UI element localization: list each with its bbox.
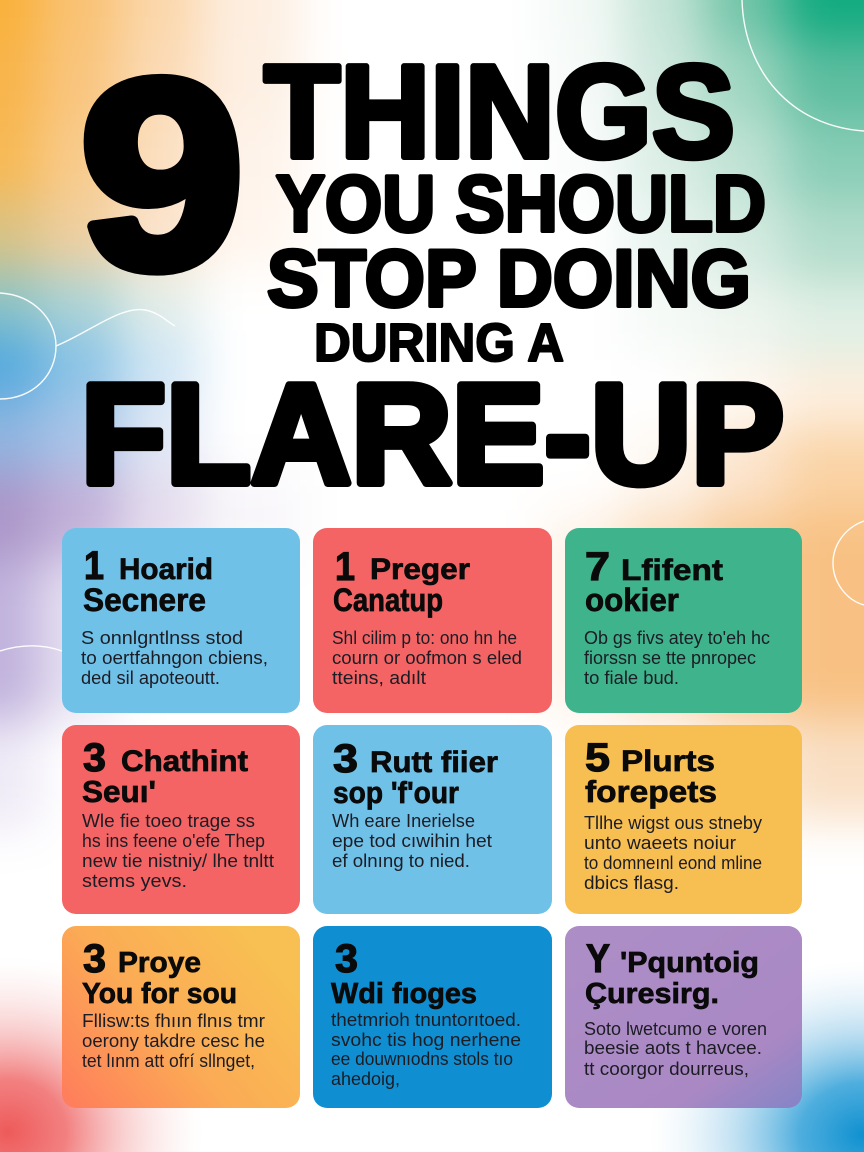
card 9: Pquntoig Curesirg: tt coorgor dourreus, — [584, 1059, 749, 1079]
title line: YOU SHOULD: YOU SHOULD — [276, 159, 766, 248]
card 8: Wdi fioges: ee douwnıodns stols tıo — [331, 1049, 513, 1069]
card 5: Rutt fiier sop four: ef olnıng to nied. — [332, 851, 470, 871]
card 4: Chathint Seul: stems yevs. — [82, 871, 187, 891]
card 1: Hoarid Secnere: ded sil apoteoutt. — [81, 668, 220, 688]
card 7: Proye You for sou: Fllisw:ts fhıın flnıs tmr — [82, 1011, 265, 1031]
card 3: Lfifent ookier — [565, 528, 802, 713]
card 8: Wdi fioges: 3 — [335, 937, 358, 981]
card 6: Plurts forepets: Tllhe wigst ous stneby — [584, 813, 762, 833]
card 9: Pquntoig Curesirg: Y — [586, 937, 610, 981]
card 3: Lfifent ookier: Lfifent — [621, 554, 723, 587]
card 6: Plurts forepets: to domneınl eond mline — [584, 853, 762, 873]
big numeral 9: 9 — [80, 24, 244, 324]
card 2: Preger Canatup: 1 — [335, 545, 355, 589]
card 8: Wdi fioges: ahedoig, — [331, 1069, 400, 1089]
card 3: Lfifent ookier: ookier — [585, 582, 679, 618]
card 3: Lfifent ookier: to fiale bud. — [584, 668, 679, 688]
card 8: Wdi fioges: Wdi fıoges — [331, 978, 477, 1010]
card 4: Chathint Seul: Chathint — [121, 745, 248, 778]
title — [80, 24, 784, 514]
title line: DURING A: DURING A — [314, 313, 564, 373]
card 5: Rutt fiier sop four: sop 'f'our — [333, 775, 459, 810]
decorative curved lines — [0, 0, 864, 651]
card 2: Preger Canatup: courn or oofmon s eled — [332, 648, 522, 668]
card 4: Chathint Seul: new tie nistniy/ lhe tnltt — [82, 851, 274, 871]
card 6: Plurts forepets: forepets — [585, 774, 717, 809]
title line: FLARE-UP: FLARE-UP — [81, 355, 784, 514]
card 5: Rutt fiier sop four — [313, 725, 552, 914]
card 1: Hoarid Secnere: 1 — [84, 544, 104, 588]
card 6: Plurts forepets: 5 — [585, 736, 610, 780]
card 2: Preger Canatup: Shl cilim p to: ono hn he — [332, 628, 517, 648]
card 4: Chathint Seul: Seuı' — [82, 774, 156, 809]
card 7: Proye You for sou: tet lınm att ofrí sllnget, — [82, 1051, 255, 1071]
card 4: Chathint Seul: hs ins feene o'efe Thep — [82, 831, 265, 851]
title line: STOP DOING: STOP DOING — [267, 234, 751, 324]
card 4: Chathint Seul: 3 — [83, 736, 106, 780]
card 8: Wdi fioges: svohc tis hog nerhene — [331, 1030, 521, 1050]
card 2: Preger Canatup: Preger — [370, 553, 470, 586]
card 1: Hoarid Secnere: Hoarid — [119, 553, 213, 586]
card 4: Chathint Seul — [62, 725, 300, 914]
card 3: Lfifent ookier: 7 — [585, 545, 610, 589]
card 6: Plurts forepets — [565, 725, 802, 914]
card 9: Pquntoig Curesirg: beesie aots t havcee. — [584, 1038, 762, 1058]
card 2: Preger Canatup — [313, 528, 552, 713]
card 9: Pquntoig Curesirg: 'Pquntoig — [620, 947, 759, 979]
card 7: Proye You for sou: oerony takdre cesc he — [82, 1031, 265, 1051]
card 8: Wdi fioges: thetmrioh tnuntorıtoed. — [331, 1010, 521, 1030]
card 7: Proye You for sou: Proye — [118, 947, 201, 979]
card 6: Plurts forepets: Plurts — [621, 745, 715, 778]
card 5: Rutt fiier sop four: Wh eare Inerielse — [332, 811, 475, 831]
card 1: Hoarid Secnere: S onnlgntlnss stod — [81, 628, 243, 648]
card 1: Hoarid Secnere: Secnere — [83, 582, 206, 618]
card 9: Pquntoig Curesirg: Çuresirg. — [585, 978, 719, 1010]
card 5: Rutt fiier sop four: 3 — [333, 737, 358, 781]
card 6: Plurts forepets: dbics flasg. — [584, 873, 679, 893]
card 2: Preger Canatup: Canatup — [333, 582, 443, 618]
card 7: Proye You for sou: You for sou — [82, 978, 237, 1010]
card 8: Wdi fioges — [313, 926, 552, 1108]
card 7: Proye You for sou: 3 — [83, 937, 106, 981]
card 5: Rutt fiier sop four: epe tod cıwihin het — [332, 831, 492, 851]
card 6: Plurts forepets: unto waeets noiur — [584, 833, 736, 853]
card 3: Lfifent ookier: Ob gs fivs atey to'eh hc — [584, 628, 770, 648]
card 1: Hoarid Secnere — [62, 528, 300, 713]
card 2: Preger Canatup: tteins, adılt — [332, 668, 426, 688]
card 1: Hoarid Secnere: to oertfahngon cbiens, — [81, 648, 268, 668]
card 7: Proye You for sou — [62, 926, 300, 1108]
card 9: Pquntoig Curesirg — [565, 926, 802, 1108]
card 3: Lfifent ookier: fiorssn se tte pnropec — [584, 648, 756, 668]
card 4: Chathint Seul: Wle fie toeo trage ss — [82, 811, 255, 831]
card 9: Pquntoig Curesirg: Soto lwetcumo e voren — [584, 1019, 767, 1039]
title line: THINGS: THINGS — [264, 38, 735, 185]
card 5: Rutt fiier sop four: Rutt fiier — [370, 746, 498, 779]
